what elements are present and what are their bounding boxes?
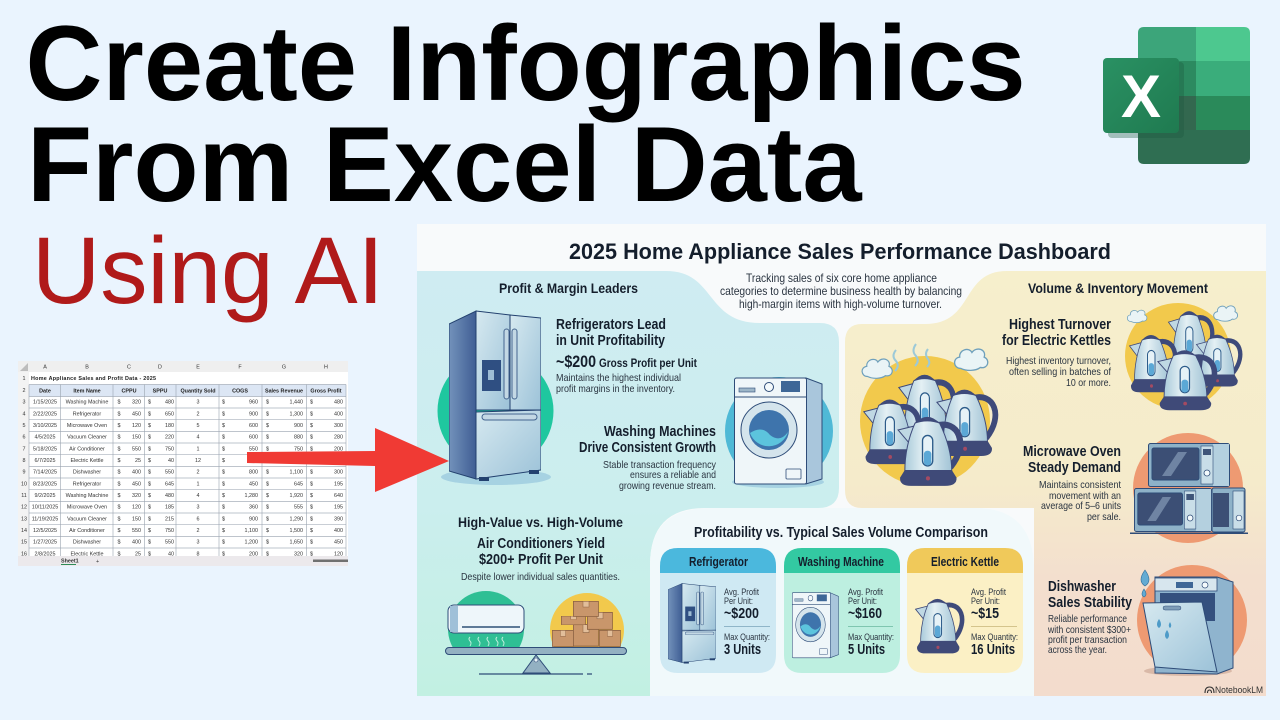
spreadsheet: $	[266, 470, 269, 476]
spreadsheet: SPPU	[153, 388, 167, 394]
spreadsheet: 320	[132, 400, 141, 406]
spreadsheet: COGS	[232, 388, 248, 394]
spreadsheet: $	[310, 481, 313, 487]
spreadsheet: $	[222, 481, 225, 487]
card: electric kettle: 16 Units	[971, 641, 1015, 658]
spreadsheet: 2	[196, 528, 200, 534]
spreadsheet: Electric Kettle	[71, 551, 103, 557]
spreadsheet: Electric Kettle	[71, 458, 103, 464]
spreadsheet: 2	[196, 470, 200, 476]
spreadsheet: 880	[294, 435, 303, 441]
spreadsheet: $	[222, 516, 225, 522]
spreadsheet: $	[118, 528, 120, 534]
spreadsheet: 555	[294, 505, 303, 511]
logo: NotebookLM: NotebookLM	[1215, 685, 1263, 695]
spreadsheet: $	[266, 435, 269, 441]
spreadsheet: 1	[196, 446, 200, 452]
spreadsheet: Vacuum Cleaner	[67, 516, 107, 522]
dashboard intro text	[720, 271, 962, 311]
spreadsheet: 960	[249, 400, 258, 406]
icon: microwaves	[1130, 433, 1248, 543]
spreadsheet: 900	[294, 423, 303, 429]
spreadsheet: $	[222, 540, 225, 546]
spreadsheet: 1,440	[290, 400, 303, 406]
spreadsheet: 3	[196, 505, 200, 511]
spreadsheet: 200	[334, 446, 343, 452]
dashboard intro text: Tracking sales of six core home appliance	[746, 271, 937, 285]
spreadsheet: 11/19/2025	[32, 516, 58, 522]
text: washing machines: growing revenue stream.	[619, 480, 716, 492]
spreadsheet: 10	[21, 481, 27, 487]
icon: Excel logo: X	[1121, 63, 1161, 130]
subtitle: Using AI: Using AI	[32, 218, 384, 324]
text: dishwasher: profit per transaction	[1048, 634, 1127, 646]
card: refrigerator: ~$200	[724, 605, 759, 622]
spreadsheet: 320	[294, 551, 303, 557]
spreadsheet: Vacuum Cleaner	[67, 435, 107, 441]
spreadsheet: 400	[132, 540, 141, 546]
spreadsheet: $	[310, 551, 313, 557]
spreadsheet: 1	[22, 376, 26, 382]
spreadsheet: $	[222, 435, 225, 441]
spreadsheet: Microwave Oven	[67, 505, 107, 511]
spreadsheet: 4/5/2025	[35, 435, 55, 441]
spreadsheet: 1,920	[290, 493, 303, 499]
text: high-value vs high-volume: High-Value vs. High-Volume	[458, 514, 623, 530]
text: microwave oven: average of 5–6 units	[1041, 500, 1121, 512]
heading: profit and margin leaders: Profit & Margin Leaders	[499, 280, 638, 296]
spreadsheet: 10/11/2025	[32, 505, 58, 511]
spreadsheet: $	[310, 446, 313, 452]
spreadsheet: $	[148, 516, 151, 522]
spreadsheet: $	[118, 516, 120, 522]
spreadsheet: $	[118, 470, 120, 476]
spreadsheet: $	[310, 470, 313, 476]
spreadsheet: 12	[21, 505, 27, 511]
spreadsheet: 750	[165, 528, 174, 534]
spreadsheet: 25	[135, 458, 141, 464]
spreadsheet: 3	[196, 400, 200, 406]
text: high-value vs high-volume: Despite lower individual sales quantities.	[461, 571, 620, 583]
text: dishwasher: Dishwasher	[1048, 578, 1116, 595]
spreadsheet: $	[310, 516, 313, 522]
spreadsheet: 800	[249, 470, 258, 476]
spreadsheet: 400	[132, 470, 141, 476]
spreadsheet: 15	[21, 540, 27, 546]
spreadsheet: 215	[165, 516, 174, 522]
spreadsheet: 180	[165, 423, 174, 429]
spreadsheet: $	[148, 435, 151, 441]
heading: comparison: Profitability vs. Typical Sales Volume Comparison	[694, 525, 988, 541]
spreadsheet: 5	[22, 423, 26, 429]
spreadsheet: Dishwasher	[73, 470, 101, 476]
spreadsheet: $	[148, 528, 151, 534]
spreadsheet: Item Name	[73, 388, 101, 394]
spreadsheet: Sales Revenue	[265, 388, 303, 394]
spreadsheet: 12	[195, 458, 201, 464]
spreadsheet: $	[266, 528, 269, 534]
spreadsheet: $	[310, 493, 313, 499]
panel: profit and margin leaders	[417, 271, 839, 696]
text: microwave oven: movement with an	[1049, 490, 1121, 502]
arrow: spreadsheet to infographic	[247, 428, 449, 492]
spreadsheet: 150	[132, 435, 141, 441]
spreadsheet: 1,100	[244, 528, 258, 534]
spreadsheet: $	[118, 423, 120, 429]
spreadsheet: 390	[334, 516, 343, 522]
spreadsheet: 9/2/2025	[35, 493, 55, 499]
spreadsheet: $	[266, 540, 269, 546]
spreadsheet: 5/18/2025	[33, 446, 57, 452]
spreadsheet: $	[148, 540, 151, 546]
text: highest turnover: for Electric Kettles	[1002, 333, 1111, 349]
spreadsheet: $	[266, 505, 269, 511]
text: refrigerators lead: profit margins in the inventory.	[556, 383, 675, 395]
spreadsheet: Sheet1	[61, 558, 79, 564]
spreadsheet: 450	[249, 481, 258, 487]
spreadsheet: 40	[168, 551, 174, 557]
text: refrigerators lead	[556, 317, 697, 395]
spreadsheet: 2/8/2025	[35, 551, 55, 557]
spreadsheet: $	[310, 400, 313, 406]
spreadsheet: 650	[165, 411, 174, 417]
spreadsheet: 645	[165, 481, 174, 487]
spreadsheet: Refrigerator	[73, 481, 101, 487]
text: washing machines: Washing Machines	[604, 424, 716, 440]
text: high-value vs high-volume: Air Conditioners Yield	[477, 536, 605, 552]
spreadsheet: 360	[249, 505, 258, 511]
spreadsheet: 550	[132, 528, 141, 534]
icon: balance scale with air conditioner and boxes	[446, 591, 626, 674]
spreadsheet: $	[118, 446, 120, 452]
icon: kettle group small	[1125, 303, 1240, 410]
spreadsheet: 16	[21, 551, 27, 557]
spreadsheet: Date	[39, 388, 51, 394]
spreadsheet: $	[148, 400, 151, 406]
spreadsheet: 480	[334, 400, 343, 406]
spreadsheet: Air Conditioner	[69, 528, 105, 534]
spreadsheet: $	[310, 540, 313, 546]
spreadsheet: $	[222, 470, 225, 476]
card: refrigerator: 3 Units	[724, 641, 761, 658]
spreadsheet: D	[158, 364, 162, 370]
spreadsheet: 6/7/2025	[35, 458, 55, 464]
spreadsheet: 3	[196, 540, 200, 546]
spreadsheet: 11	[21, 493, 27, 499]
spreadsheet: 450	[132, 481, 141, 487]
spreadsheet: $	[266, 481, 269, 487]
spreadsheet: 480	[165, 400, 174, 406]
spreadsheet: $	[118, 400, 120, 406]
text: dishwasher: across the year.	[1048, 644, 1107, 656]
spreadsheet: 750	[165, 446, 174, 452]
spreadsheet: Quantity Sold	[180, 388, 216, 394]
title	[26, 4, 1026, 224]
spreadsheet: Home Appliance Sales and Profit Data - 2025	[31, 376, 156, 382]
spreadsheet: $	[118, 481, 120, 487]
spreadsheet: $	[266, 493, 269, 499]
spreadsheet: 600	[249, 435, 258, 441]
spreadsheet: $	[148, 481, 151, 487]
spreadsheet: Gross Profit	[310, 388, 342, 394]
spreadsheet: 14	[21, 528, 27, 534]
spreadsheet: F	[238, 364, 242, 370]
spreadsheet: 13	[21, 516, 27, 522]
spreadsheet: 120	[132, 505, 141, 511]
dashboard intro text: high-margin items with high-volume turnover.	[739, 297, 942, 311]
spreadsheet: $	[266, 551, 269, 557]
spreadsheet: 1/15/2025	[33, 400, 57, 406]
card: refrigerator	[660, 548, 776, 673]
text: washing machines	[579, 424, 717, 492]
spreadsheet: 400	[334, 528, 343, 534]
card: refrigerator: Refrigerator	[689, 554, 748, 569]
spreadsheet: 7/14/2025	[33, 470, 57, 476]
spreadsheet: 195	[334, 481, 343, 487]
spreadsheet: 120	[132, 423, 141, 429]
spreadsheet: $	[310, 411, 313, 417]
spreadsheet: 2	[22, 388, 26, 394]
spreadsheet: 40	[168, 458, 174, 464]
spreadsheet: 220	[165, 435, 174, 441]
spreadsheet: $	[222, 411, 225, 417]
spreadsheet	[18, 361, 348, 566]
text: high-value vs high-volume: $200+ Profit Per Unit	[479, 552, 603, 568]
icon: dishwasher	[1137, 565, 1247, 676]
spreadsheet: $	[222, 493, 225, 499]
spreadsheet: $	[266, 411, 269, 417]
spreadsheet: 1,650	[290, 540, 303, 546]
card: refrigerator: Avg. Profit	[724, 587, 759, 598]
spreadsheet: $	[148, 458, 151, 464]
text: highest turnover: Highest Turnover	[1009, 317, 1111, 333]
spreadsheet: $	[222, 551, 225, 557]
spreadsheet: Washing Machine	[66, 493, 108, 499]
text: refrigerators lead: ~$200	[556, 352, 596, 371]
spreadsheet: C	[127, 364, 131, 370]
spreadsheet: $	[148, 505, 151, 511]
spreadsheet: 2/22/2025	[33, 411, 57, 417]
spreadsheet: B	[85, 364, 89, 370]
text: dishwasher: Reliable performance	[1048, 613, 1127, 625]
card: electric kettle: Avg. Profit	[971, 587, 1006, 598]
text: washing machines: ensures a reliable and	[630, 469, 716, 481]
spreadsheet: 600	[249, 423, 258, 429]
text: dishwasher: with consistent $300+	[1047, 624, 1131, 636]
spreadsheet: $	[222, 505, 225, 511]
spreadsheet: H	[324, 364, 328, 370]
spreadsheet: 280	[334, 435, 343, 441]
dashboard intro text: categories to determine business health by balancing	[720, 284, 962, 298]
spreadsheet: $	[310, 423, 313, 429]
spreadsheet: 8/23/2025	[33, 481, 57, 487]
spreadsheet: A	[43, 364, 47, 370]
spreadsheet: 120	[334, 551, 343, 557]
spreadsheet: 4	[22, 411, 26, 417]
spreadsheet: $	[222, 458, 225, 464]
spreadsheet: $	[310, 505, 313, 511]
spreadsheet: 550	[132, 446, 141, 452]
card: electric kettle: Max Quantity:	[971, 632, 1018, 643]
spreadsheet: Microwave Oven	[67, 423, 107, 429]
text: microwave oven: Maintains consistent	[1039, 479, 1121, 491]
spreadsheet: 150	[132, 516, 141, 522]
text: washing machines: Drive Consistent Growth	[579, 440, 716, 456]
spreadsheet: Dishwasher	[73, 540, 101, 546]
title: Create Infographics	[26, 4, 1026, 123]
spreadsheet: 185	[165, 505, 174, 511]
text: refrigerators lead: Gross Profit per Unit	[599, 356, 697, 370]
spreadsheet: 645	[294, 481, 303, 487]
card: washing machine: 5 Units	[848, 641, 885, 658]
text: washing machines: Stable transaction frequency	[603, 459, 717, 471]
spreadsheet: 25	[135, 551, 141, 557]
spreadsheet: $	[266, 446, 269, 452]
card: washing machine: ~$160	[848, 605, 882, 622]
spreadsheet: Washing Machine	[66, 400, 108, 406]
spreadsheet: $	[266, 423, 269, 429]
text: microwave oven: Steady Demand	[1028, 460, 1121, 476]
text: highest turnover: Highest inventory turnover,	[1006, 355, 1111, 367]
spreadsheet: 7	[22, 446, 26, 452]
spreadsheet: 6	[22, 435, 26, 441]
spreadsheet: $	[266, 400, 269, 406]
spreadsheet: Air Conditioner	[69, 446, 105, 452]
spreadsheet: $	[118, 435, 120, 441]
spreadsheet: 550	[165, 540, 174, 546]
spreadsheet: $	[222, 446, 225, 452]
icon: washing machine	[725, 377, 833, 488]
text: highest turnover	[1002, 317, 1111, 389]
infographic background	[417, 224, 1266, 696]
spreadsheet: 8	[22, 458, 26, 464]
spreadsheet: $	[148, 423, 151, 429]
panel: comparison background	[650, 508, 1034, 696]
spreadsheet: $	[148, 493, 151, 499]
spreadsheet: 450	[334, 540, 343, 546]
spreadsheet: 4	[196, 493, 200, 499]
spreadsheet: 900	[249, 411, 258, 417]
card: washing machine: Max Quantity:	[848, 632, 894, 643]
icon: Excel logo	[1103, 27, 1250, 164]
text: refrigerators lead: Refrigerators Lead	[556, 317, 666, 333]
spreadsheet: 1,200	[244, 540, 258, 546]
icon: kettle group large	[860, 344, 995, 486]
card: electric kettle: Per Unit:	[971, 596, 1000, 607]
spreadsheet: 1,300	[290, 411, 303, 417]
card: washing machine: Avg. Profit	[848, 587, 883, 598]
spreadsheet: 12/5/2025	[33, 528, 57, 534]
card: electric kettle: Electric Kettle	[931, 554, 999, 569]
spreadsheet: 300	[334, 423, 343, 429]
spreadsheet: $	[118, 458, 120, 464]
spreadsheet: 9	[22, 470, 26, 476]
dashboard heading: 2025 Home Appliance Sales Performance Dashboard	[569, 239, 1111, 264]
panel: volume and inventory movement	[845, 271, 1266, 696]
spreadsheet: 1,500	[290, 528, 303, 534]
spreadsheet: 550	[165, 470, 174, 476]
spreadsheet: 3	[22, 400, 26, 406]
text: refrigerators lead: Maintains the highest individual	[556, 372, 681, 384]
text: microwave oven	[1023, 444, 1121, 523]
spreadsheet: $	[222, 400, 225, 406]
spreadsheet: 900	[249, 516, 258, 522]
spreadsheet: $	[310, 435, 313, 441]
text: dishwasher	[1047, 578, 1133, 656]
card: refrigerator: Per Unit:	[724, 596, 753, 607]
spreadsheet: +	[96, 559, 99, 565]
card: washing machine: Per Unit:	[848, 596, 877, 607]
text: microwave oven: Microwave Oven	[1023, 444, 1121, 460]
card: refrigerator: Max Quantity:	[724, 632, 770, 643]
spreadsheet: Refrigerator	[73, 411, 101, 417]
spreadsheet: 480	[165, 493, 174, 499]
spreadsheet: 3/10/2025	[33, 423, 57, 429]
icon: refrigerator	[438, 311, 554, 485]
heading: volume and inventory movement: Volume & Inventory Movement	[1028, 280, 1208, 296]
spreadsheet: E	[196, 364, 200, 370]
spreadsheet: 195	[334, 505, 343, 511]
spreadsheet: 2	[196, 411, 200, 417]
text: high-value vs high-volume	[458, 514, 623, 583]
card: electric kettle	[907, 548, 1023, 673]
spreadsheet: 1	[196, 481, 200, 487]
spreadsheet: $	[148, 446, 151, 452]
spreadsheet: 200	[249, 551, 258, 557]
text: refrigerators lead: in Unit Profitability	[556, 333, 665, 349]
spreadsheet: 640	[334, 493, 343, 499]
card: washing machine: Washing Machine	[798, 554, 884, 569]
spreadsheet: 1,100	[290, 470, 303, 476]
spreadsheet: $	[118, 411, 120, 417]
spreadsheet: 320	[132, 493, 141, 499]
spreadsheet: $	[310, 528, 313, 534]
text: microwave oven: per sale.	[1087, 511, 1121, 523]
spreadsheet: CPPU	[122, 388, 137, 394]
spreadsheet: G	[282, 364, 286, 370]
spreadsheet: $	[148, 411, 151, 417]
spreadsheet: $	[118, 505, 120, 511]
title: From Excel Data	[27, 105, 862, 224]
text: dishwasher: Sales Stability	[1048, 594, 1133, 611]
text: highest turnover: 10 or more.	[1066, 377, 1111, 389]
spreadsheet: $	[118, 551, 120, 557]
spreadsheet: 1,290	[290, 516, 303, 522]
spreadsheet: $	[222, 528, 225, 534]
spreadsheet: 750	[294, 446, 303, 452]
spreadsheet: 400	[334, 411, 343, 417]
spreadsheet: $	[118, 540, 120, 546]
spreadsheet: 8	[196, 551, 200, 557]
card: electric kettle: ~$15	[971, 605, 999, 622]
spreadsheet: 4	[196, 435, 200, 441]
spreadsheet: 5	[196, 423, 200, 429]
spreadsheet: 6	[196, 516, 200, 522]
text: highest turnover: often selling in batches of	[1009, 366, 1111, 378]
spreadsheet: $	[118, 493, 120, 499]
spreadsheet: $	[148, 470, 151, 476]
card: washing machine	[784, 548, 900, 673]
spreadsheet: $	[266, 516, 269, 522]
spreadsheet: 450	[132, 411, 141, 417]
spreadsheet: 1,280	[244, 493, 258, 499]
spreadsheet: 300	[334, 470, 343, 476]
spreadsheet: 550	[249, 446, 258, 452]
spreadsheet: 1/27/2025	[33, 540, 57, 546]
spreadsheet: $	[148, 551, 151, 557]
spreadsheet: $	[222, 423, 225, 429]
